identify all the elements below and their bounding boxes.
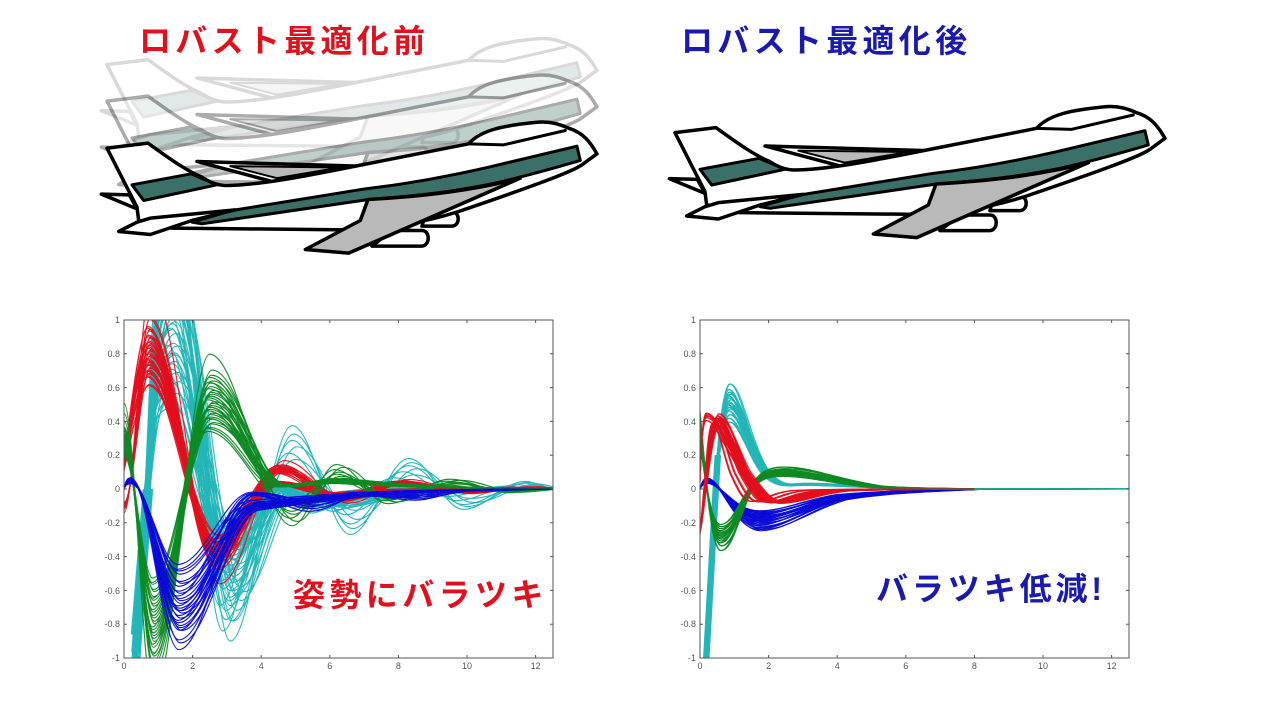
callout: attitude variation: 姿勢にバラツキ: [293, 577, 548, 613]
title: before robust optimization: ロバスト最適化前: [139, 23, 429, 59]
curve bundles: [124, 320, 552, 658]
airplane after optimization: [669, 107, 1165, 238]
red curves: [124, 320, 552, 584]
blue curves: [124, 478, 579, 650]
x axis labels: 6: [903, 661, 908, 671]
y axis labels: 0.8: [107, 349, 120, 359]
x axis labels: 2: [766, 661, 771, 671]
y axis labels: -0.6: [104, 586, 120, 596]
y axis labels: -0.4: [104, 552, 120, 562]
x axis labels: 6: [327, 661, 332, 671]
x axis labels: 4: [259, 661, 264, 671]
chart: response before optimization: [104, 316, 554, 669]
x axis labels: [121, 661, 541, 671]
ghost airplane: farthest: [101, 39, 597, 170]
y axis labels: 0.6: [107, 383, 120, 393]
x axis labels: 2: [190, 661, 195, 671]
y axis labels: 0.4: [683, 417, 696, 427]
cyan curves: [124, 320, 552, 658]
chart: response after optimization: [680, 316, 1130, 669]
x axis labels: 12: [1107, 661, 1117, 671]
x axis labels: 10: [462, 661, 472, 671]
y axis labels: 0.8: [683, 349, 696, 359]
red curves: [700, 412, 1126, 534]
axes frame and ticks: [124, 320, 553, 658]
y axis labels: [680, 315, 696, 663]
x axis labels: 4: [835, 661, 840, 671]
x axis labels: 10: [1038, 661, 1048, 671]
y axis labels: 1: [691, 315, 696, 325]
y axis labels: 0: [115, 484, 120, 494]
y axis labels: -0.2: [680, 518, 696, 528]
ghost airplane: middle: [101, 75, 597, 206]
blue curves: [700, 478, 980, 532]
x axis labels: [697, 661, 1117, 671]
y axis labels: -0.6: [680, 586, 696, 596]
y axis labels: -0.4: [680, 552, 696, 562]
y axis labels: -1: [688, 653, 696, 663]
title: after robust optimization: ロバスト最適化後: [681, 23, 971, 59]
x axis labels: 0: [697, 661, 703, 671]
green curves: [700, 412, 1155, 551]
airplane before optimization with ghost attitude variation: [101, 39, 597, 253]
y axis labels: -1: [112, 653, 120, 663]
axes frame and ticks: [700, 320, 1129, 658]
x axis labels: 0: [121, 661, 127, 671]
y axis labels: 0: [691, 484, 696, 494]
y axis labels: 0.2: [683, 450, 696, 460]
x axis labels: 8: [396, 661, 401, 671]
x axis labels: 12: [531, 661, 541, 671]
y axis labels: -0.8: [680, 619, 696, 629]
green curves: [124, 354, 552, 658]
y axis labels: [104, 315, 120, 663]
y axis labels: -0.8: [104, 619, 120, 629]
callout: variation reduced: バラツキ低減!: [876, 571, 1106, 607]
y axis labels: 1: [115, 315, 120, 325]
y axis labels: 0.6: [683, 383, 696, 393]
y axis labels: 0.2: [107, 450, 120, 460]
tail line: [974, 488, 1129, 490]
airplane: current attitude: [101, 122, 597, 253]
cyan curves: [706, 384, 1159, 666]
y axis labels: -0.2: [104, 518, 120, 528]
y axis labels: 0.4: [107, 417, 120, 427]
curve bundles: [700, 383, 1128, 658]
x axis labels: 8: [972, 661, 977, 671]
